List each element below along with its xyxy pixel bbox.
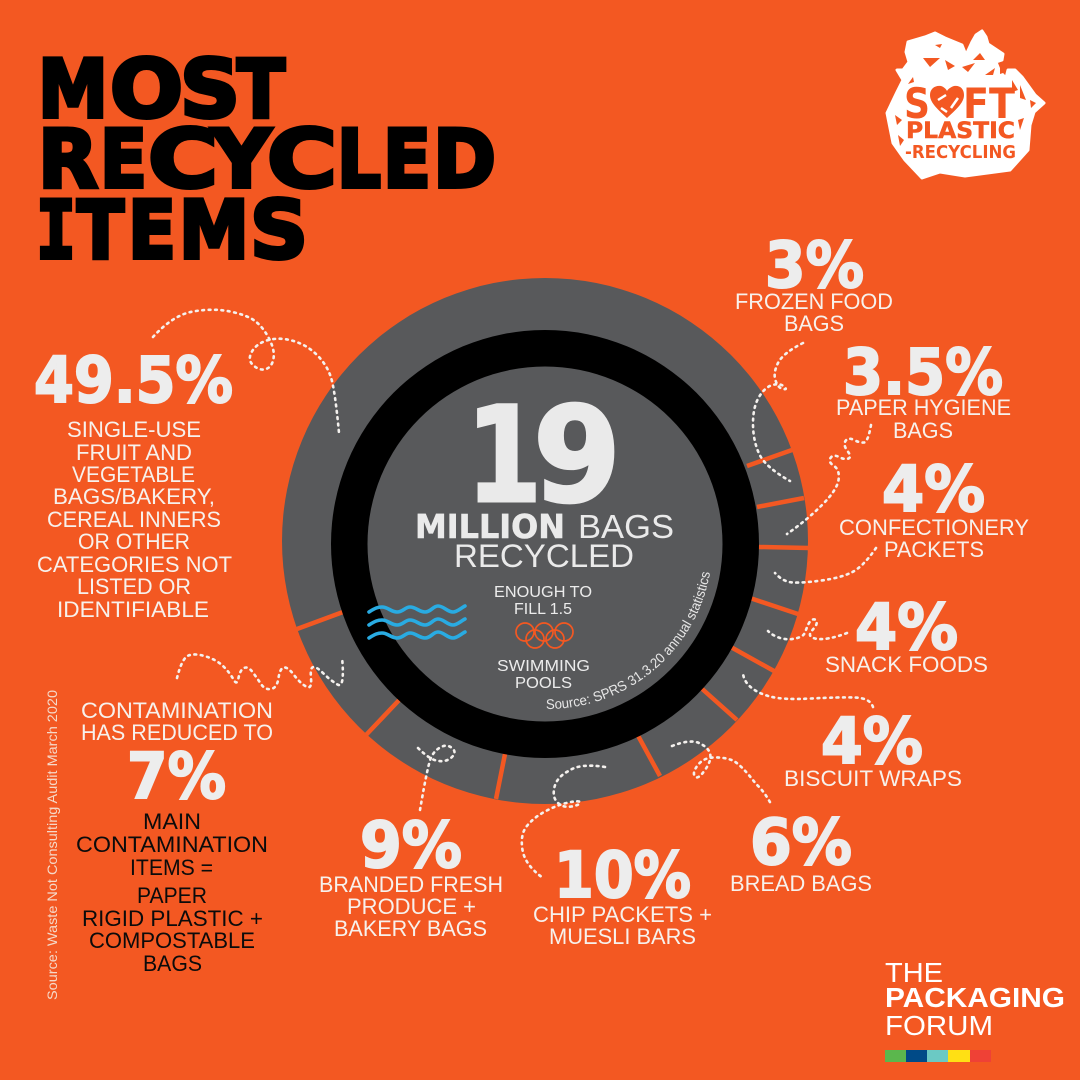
centre total: 19 million bags recycled: BAGS xyxy=(578,508,674,545)
stat: 49.5%: BAGS/BAKERY, xyxy=(53,484,215,509)
stat: 4% biscuit wraps: 4% xyxy=(821,705,923,778)
logo: the packaging forum: FORUM xyxy=(885,1010,993,1041)
stat: 6% bread bags: BREAD BAGS xyxy=(730,871,872,896)
logo wordmark: FT xyxy=(963,79,1015,128)
stat: contamination 7%: HAS REDUCED TO xyxy=(81,720,273,745)
stat: 49.5%: FRUIT AND xyxy=(76,440,192,465)
centre total: 19 million bags recycled: 9 xyxy=(533,379,621,533)
title: L xyxy=(337,113,381,206)
logo scribble gaps xyxy=(895,44,1036,146)
stat: contamination 7%: MAIN xyxy=(143,809,201,834)
stat: contamination 7%: BAGS xyxy=(143,951,202,976)
stat: 3.5% paper hygiene: BAGS xyxy=(893,418,953,443)
connector: snack foods xyxy=(768,619,847,639)
stat: 4% confectionery xyxy=(839,453,1029,562)
stat: 6% bread bags: 6% xyxy=(750,806,852,879)
connector: paper hygiene xyxy=(787,425,871,534)
stat: 49.5%: CEREAL INNERS xyxy=(47,507,221,532)
stat: 10% chip packets: MUESLI BARS xyxy=(549,924,696,949)
stat: 49.5% xyxy=(34,344,233,622)
stat: contamination 7% xyxy=(76,698,273,976)
stat: 4% snack foods xyxy=(825,591,988,677)
stat: 49.5%: IDENTIFIABLE xyxy=(57,597,209,622)
title: M xyxy=(179,184,249,277)
stat: contamination 7%: COMPOSTABLE xyxy=(89,928,255,953)
connector: biscuit wraps xyxy=(743,672,873,707)
stat: 9% branded fresh: 9% xyxy=(360,809,462,882)
connector: confectionery xyxy=(775,548,876,583)
logo scribble blob xyxy=(887,31,1044,178)
title: E xyxy=(100,113,147,206)
stat: 3% frozen food: 3% xyxy=(765,229,864,302)
title: S xyxy=(180,43,240,136)
stat: 4% confectionery: 4% xyxy=(882,453,985,526)
stat: 4% biscuit wraps: BISCUIT WRAPS xyxy=(784,766,962,791)
connector: chip packets xyxy=(522,766,605,878)
connector: branded fresh xyxy=(418,746,454,810)
stat: 3% frozen food xyxy=(735,229,893,336)
logo wordmark xyxy=(904,79,1016,163)
stat: 4% snack foods: 4% xyxy=(855,591,958,664)
centre total: 19 million bags recycled xyxy=(415,379,674,574)
stat: contamination 7%: ITEMS = xyxy=(130,855,213,880)
logo: the packaging forum: PACKAGING xyxy=(885,982,1065,1013)
title: D xyxy=(433,113,496,206)
swimming pools note xyxy=(494,584,592,692)
title: I xyxy=(36,184,76,277)
stat: 49.5%: LISTED OR xyxy=(77,574,191,599)
stat: 10% chip packets xyxy=(533,839,712,949)
logo: the packaging forum xyxy=(885,957,1065,1062)
title: E xyxy=(383,113,431,206)
stat: 4% biscuit wraps xyxy=(784,705,962,791)
donut chart xyxy=(282,278,809,804)
segment separators xyxy=(297,450,809,799)
title: Y xyxy=(211,113,272,206)
centre total: 19 million bags recycled: RECYCLED xyxy=(454,538,634,574)
connector: bread bags xyxy=(672,742,772,806)
logo wordmark: -RECYCLING xyxy=(905,142,1016,163)
logo wordmark: S xyxy=(904,79,930,128)
centre total: 19 million bags recycled: MILLION xyxy=(415,508,565,546)
stat: 3.5% paper hygiene xyxy=(836,336,1011,443)
stat: 49.5%: SINGLE-USE xyxy=(67,417,201,442)
title: E xyxy=(128,184,176,277)
icon: water waves xyxy=(369,606,465,638)
logo wordmark: PLASTIC xyxy=(906,119,1015,144)
swimming pools note: FILL 1.5 xyxy=(514,601,572,618)
stat: 3% frozen food: FROZEN FOOD xyxy=(735,289,893,314)
stat: contamination 7%: CONTAMINATION xyxy=(76,832,268,857)
stat: 9% branded fresh xyxy=(319,809,503,941)
connector: frozen food xyxy=(753,343,803,481)
stat: 9% branded fresh: PRODUCE + xyxy=(347,894,476,919)
stat: 6% bread bags xyxy=(730,806,872,896)
stat: 4% confectionery: PACKETS xyxy=(884,537,984,562)
title: C xyxy=(148,113,218,206)
icon: rings xyxy=(516,623,573,648)
stat: 3.5% paper hygiene: PAPER HYGIENE xyxy=(836,395,1011,420)
title xyxy=(36,43,496,277)
stat: contamination 7%: PAPER xyxy=(137,883,207,908)
connector: contamination xyxy=(177,654,343,689)
logo: the packaging forum: THE xyxy=(885,957,943,988)
title: O xyxy=(110,43,183,136)
title: S xyxy=(250,184,308,277)
stat: 49.5%: 49.5% xyxy=(34,344,233,417)
title: C xyxy=(267,113,337,206)
outer segmented ring xyxy=(282,278,808,804)
logo: soft plastic recycling xyxy=(887,31,1044,178)
stat: 9% branded fresh: BRANDED FRESH xyxy=(319,872,503,897)
title: T xyxy=(237,43,285,136)
colour bar xyxy=(885,1050,991,1062)
stat: 4% confectionery: CONFECTIONERY xyxy=(839,515,1029,540)
source: SPRS statistics: Source: SPRS 31.3.20 annual statistics xyxy=(546,572,710,710)
inner disc xyxy=(368,366,722,722)
source: audit: Source: Waste Not Consulting Audit March 2020 xyxy=(44,690,60,1000)
stat: 10% chip packets: 10% xyxy=(554,839,691,912)
swimming pools note: POOLS xyxy=(515,675,572,692)
swimming pools note: SWIMMING xyxy=(497,658,590,675)
stat: 49.5%: CATEGORIES NOT xyxy=(37,552,232,577)
swimming pools note: ENOUGH TO xyxy=(494,584,592,601)
connector: 49.5% xyxy=(153,310,339,433)
stat: 3% frozen food: BAGS xyxy=(784,311,844,336)
stat: 10% chip packets: CHIP PACKETS + xyxy=(533,902,712,927)
stat: 3.5% paper hygiene: 3.5% xyxy=(843,336,1003,409)
title: M xyxy=(38,43,108,136)
stat: contamination 7%: 7% xyxy=(127,740,226,813)
stat: 4% snack foods: SNACK FOODS xyxy=(825,652,988,677)
stat: 9% branded fresh: BAKERY BAGS xyxy=(334,916,487,941)
stat: 49.5%: OR OTHER xyxy=(78,529,190,554)
stat: 49.5%: VEGETABLE xyxy=(72,462,195,487)
stat: contamination 7%: RIGID PLASTIC + xyxy=(82,906,263,931)
stat: contamination 7%: CONTAMINATION xyxy=(81,698,273,723)
title: R xyxy=(38,113,98,206)
title: T xyxy=(77,184,124,277)
black ring xyxy=(331,330,759,758)
centre total: 19 million bags recycled: 1 xyxy=(466,379,542,533)
